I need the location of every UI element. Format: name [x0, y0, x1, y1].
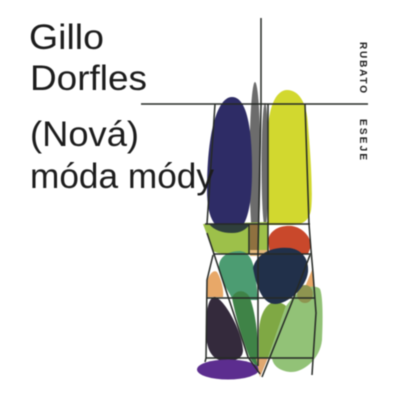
abstract figure illustration — [141, 18, 368, 380]
shape: yellow oval — [268, 90, 312, 225]
title: book — [30, 115, 214, 196]
shape: brown strip — [250, 224, 258, 251]
wire grid lines — [141, 18, 368, 377]
shape: red dome — [268, 226, 311, 254]
shape: grey slivers — [250, 82, 268, 248]
shape: dark green leaf — [232, 291, 258, 368]
shape: orange tip — [256, 358, 268, 377]
shape: dark plum oval — [206, 297, 243, 361]
shape: olive overlap — [297, 285, 313, 303]
book title line two: móda módy — [30, 157, 214, 196]
book title line one: (Nová) — [30, 115, 139, 154]
shape: purple ellipse — [197, 360, 259, 380]
shape: dark overlap — [209, 224, 250, 233]
shape: orange right — [305, 270, 315, 298]
shape: peach notch — [250, 250, 268, 256]
shape: teal blob — [219, 251, 258, 300]
author first name: Gillo — [29, 18, 104, 57]
publisher label: RUBATO: RUBATO — [357, 42, 368, 93]
shape: navy oval — [207, 97, 252, 232]
shape: light green blob — [203, 222, 268, 254]
shape: olive green leaf — [259, 302, 286, 358]
shape: dark navy blob — [253, 248, 308, 304]
publisher label: ESEJE: ESEJE — [357, 119, 368, 160]
shape: light green panel — [268, 287, 323, 372]
shape: orange left — [206, 271, 223, 297]
title: author — [29, 18, 147, 98]
author surname: Dorfles — [30, 59, 147, 98]
